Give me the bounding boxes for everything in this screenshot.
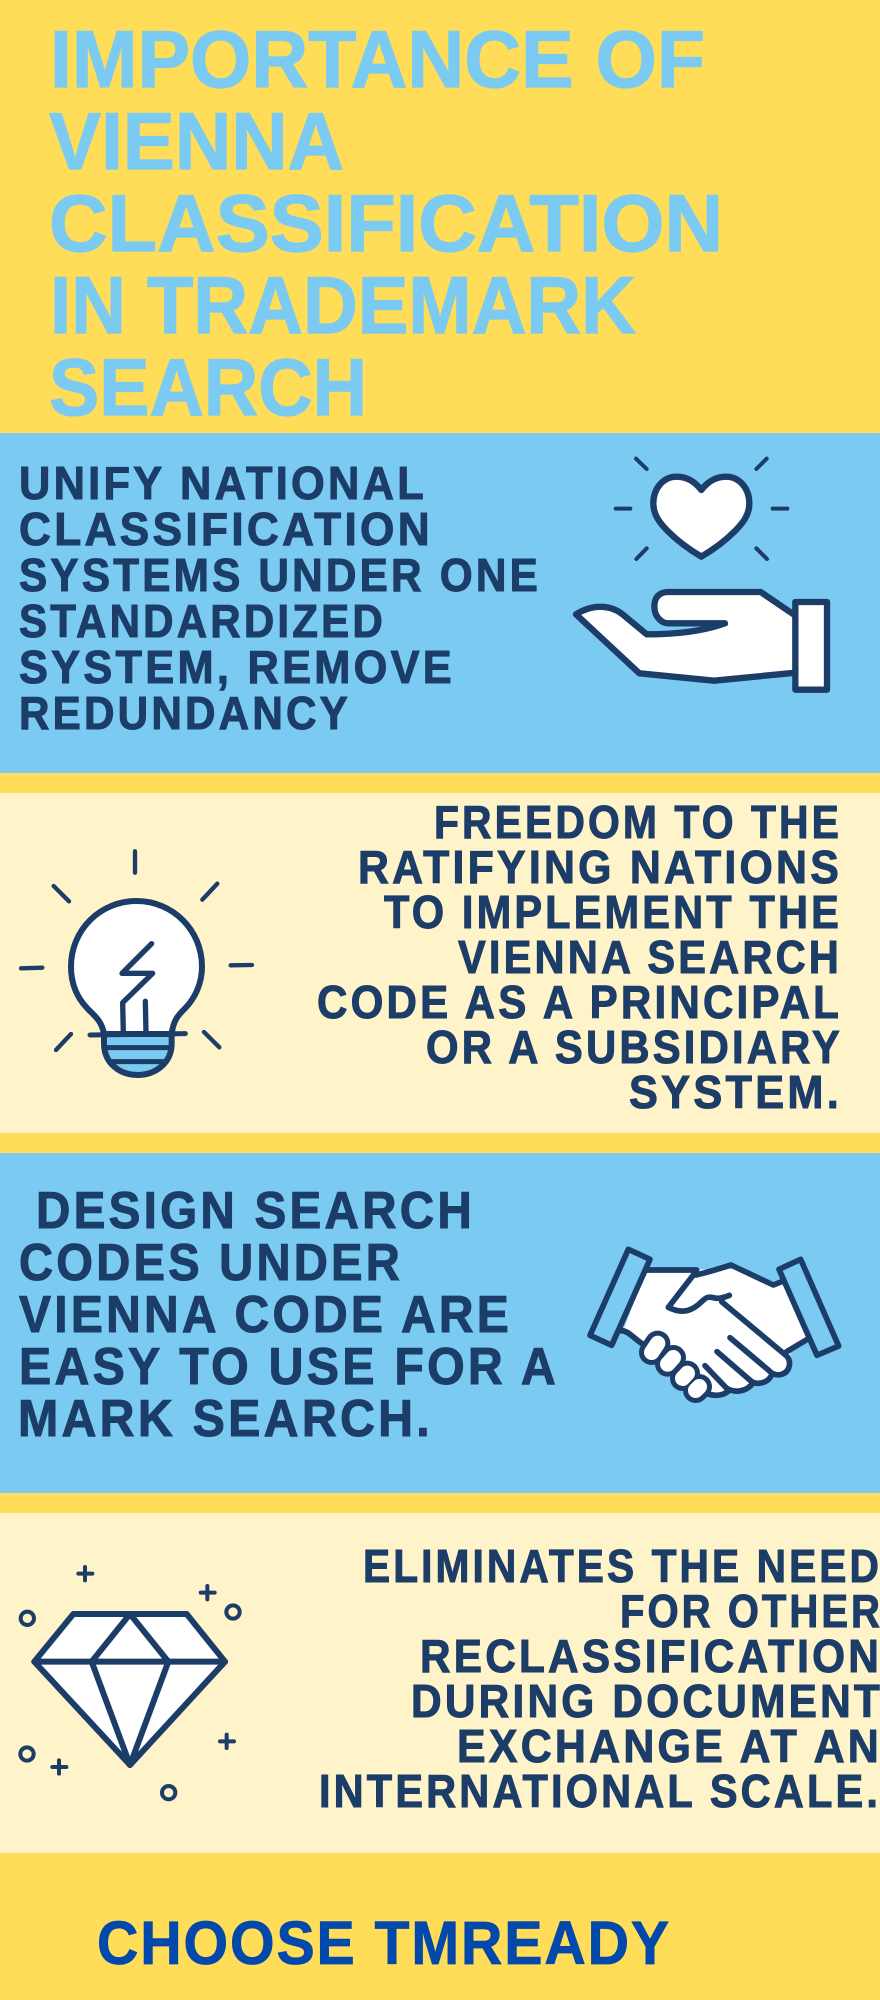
footer call to action: CHOOSE TMREADY [97, 1909, 671, 1977]
text: freedom to ratifying nations [317, 796, 843, 1118]
text: unify national classification systems: SYSTEMS UNDER ONE [19, 549, 541, 601]
text: design search codes: EASY TO USE FOR A [19, 1338, 559, 1396]
text: freedom to ratifying nations: OR A SUBSIDIARY [426, 1021, 843, 1073]
panel: eliminates reclassification [0, 1513, 880, 1853]
panel: design search codes [0, 1153, 880, 1493]
title: IMPORTANCE OF [50, 15, 705, 105]
title [49, 15, 723, 433]
text: design search codes: MARK SEARCH. [18, 1390, 433, 1448]
text: unify national classification systems: REDUNDANCY [19, 687, 351, 739]
text: design search codes: VIENNA CODE ARE [19, 1286, 512, 1344]
text: freedom to ratifying nations: CODE AS A PRINCIPAL [317, 976, 842, 1028]
text: eliminates reclassification [319, 1540, 880, 1817]
text: freedom to ratifying nations: SYSTEM. [629, 1066, 842, 1118]
title: VIENNA [49, 97, 344, 187]
text: design search codes: DESIGN SEARCH [36, 1182, 475, 1240]
icon: light bulb [21, 851, 252, 1075]
text: unify national classification systems: CLASSIFICATION [19, 503, 433, 555]
icon: handshake [590, 1249, 839, 1397]
text: design search codes [18, 1182, 559, 1448]
title: CLASSIFICATION [49, 179, 723, 269]
panel: unify classification systems [0, 433, 880, 773]
text: unify national classification systems: SYSTEM, REMOVE [19, 641, 455, 693]
text: unify national classification systems [19, 457, 541, 739]
title: SEARCH [49, 343, 367, 433]
text: unify national classification systems: UNIFY NATIONAL [19, 457, 427, 509]
icon: diamond [20, 1567, 240, 1799]
text: freedom to ratifying nations: RATIFYING NATIONS [358, 841, 842, 893]
icon: hand holding heart [576, 459, 827, 690]
text: unify national classification systems: STANDARDIZED [19, 595, 386, 647]
title: IN TRADEMARK [50, 261, 636, 351]
text: design search codes: CODES UNDER [19, 1234, 403, 1292]
text: freedom to ratifying nations: VIENNA SEARCH [458, 931, 842, 983]
panel: freedom to ratifying nations [0, 793, 880, 1133]
